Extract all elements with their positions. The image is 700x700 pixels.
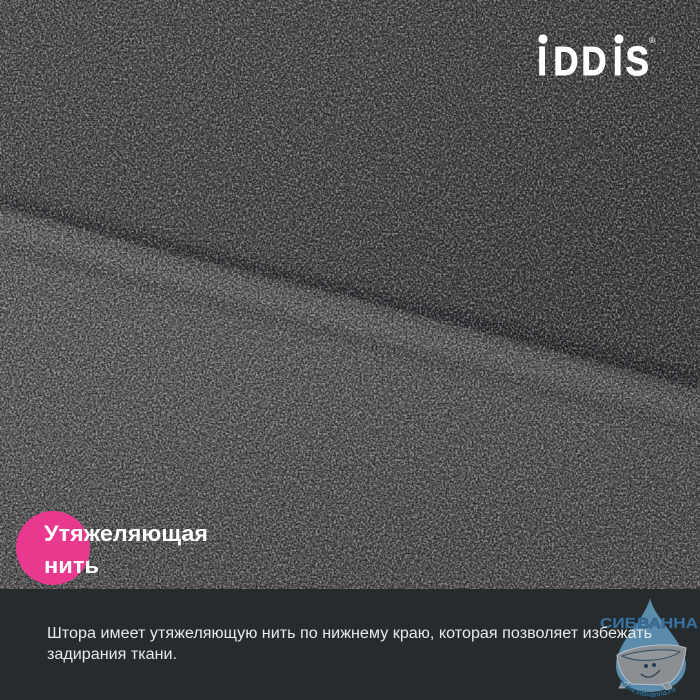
logo: IDDIS: ® (649, 36, 655, 45)
heading: Утяжеляющая (44, 521, 208, 546)
heading (44, 521, 208, 578)
upper fabric fold (0, 0, 700, 389)
stitch line (0, 245, 700, 432)
icon: smiling bathtub (617, 645, 686, 690)
pink badge circle (16, 511, 90, 585)
watermark: Sibvanna logo (600, 598, 698, 697)
website url: www.sibvanna.ru (620, 680, 676, 697)
brand name: СИБВАННА (600, 615, 698, 632)
logo: IDDIS: IDDIS (537, 39, 649, 85)
lower fabric fold (0, 206, 700, 590)
fold shadow (0, 194, 700, 389)
heading: нить (44, 553, 99, 578)
description text (47, 625, 652, 663)
description text: Штора имеет утяжеляющую нить по нижнему краю, которая позволяет избежать (47, 625, 652, 642)
icon: water drop (616, 598, 686, 692)
hem seam band (0, 228, 700, 412)
footer panel (0, 589, 700, 700)
description text: задирания ткани. (47, 646, 177, 663)
